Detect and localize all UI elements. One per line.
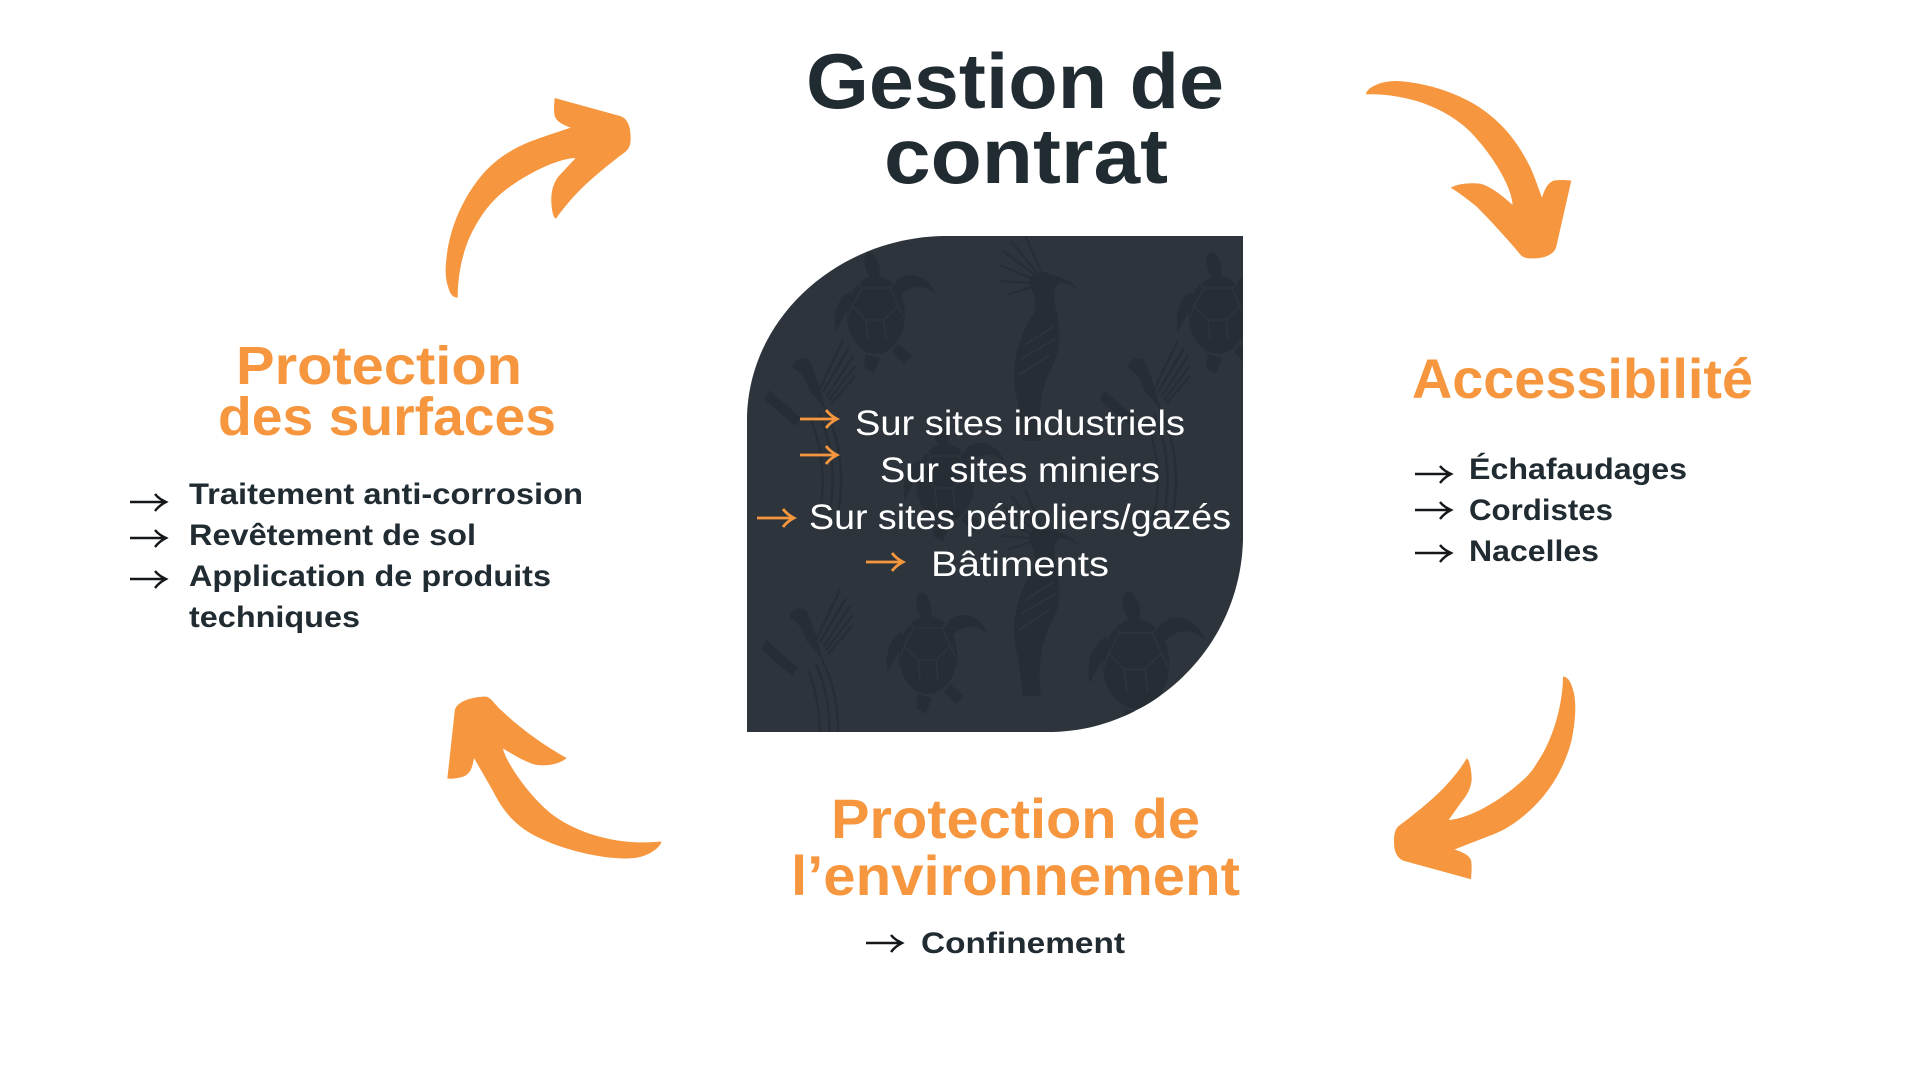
section: accessibilité: Accessibilité	[1412, 347, 1753, 410]
section: protection de l'environnement: l’environnement	[791, 844, 1240, 907]
arrow: bottom left	[447, 697, 661, 858]
section: protection de l'environnement	[791, 787, 1240, 960]
arrow: top right	[1366, 81, 1571, 258]
panel: central leaf	[747, 236, 1243, 732]
panel list: sites: Sur sites pétroliers/gazés	[809, 498, 1231, 537]
arrow: top left	[446, 98, 631, 298]
infographic canvas	[130, 52, 1752, 954]
section: protection des surfaces: Application de produits	[189, 560, 551, 593]
panel list: sites: Sur sites miniers	[880, 451, 1160, 490]
section: protection des surfaces	[130, 336, 583, 634]
section: accessibilité: Cordistes	[1469, 494, 1613, 527]
section: protection des surfaces: Revêtement de sol	[189, 519, 476, 552]
arrow: bottom right	[1394, 677, 1575, 879]
panel texture: animal motifs	[762, 235, 1278, 774]
title: contrat	[884, 112, 1168, 200]
section: accessibilité	[1412, 347, 1753, 568]
panel list: sites: Sur sites industriels	[855, 404, 1185, 443]
section: accessibilité: Échafaudages	[1469, 452, 1687, 486]
panel list: sites	[757, 404, 1231, 584]
section: protection des surfaces: Traitement anti-corrosion	[189, 478, 583, 511]
section: protection des surfaces: techniques	[189, 601, 360, 634]
section: protection de l'environnement: Confinement	[921, 927, 1125, 960]
section: protection des surfaces: des surfaces	[218, 387, 556, 447]
section: protection de l'environnement: Protection de	[831, 787, 1200, 850]
section: accessibilité: Nacelles	[1469, 535, 1599, 568]
section: protection des surfaces: Protection	[236, 336, 522, 396]
panel list: sites: Bâtiments	[931, 545, 1109, 584]
title: Gestion de	[806, 37, 1224, 125]
title	[806, 37, 1224, 200]
